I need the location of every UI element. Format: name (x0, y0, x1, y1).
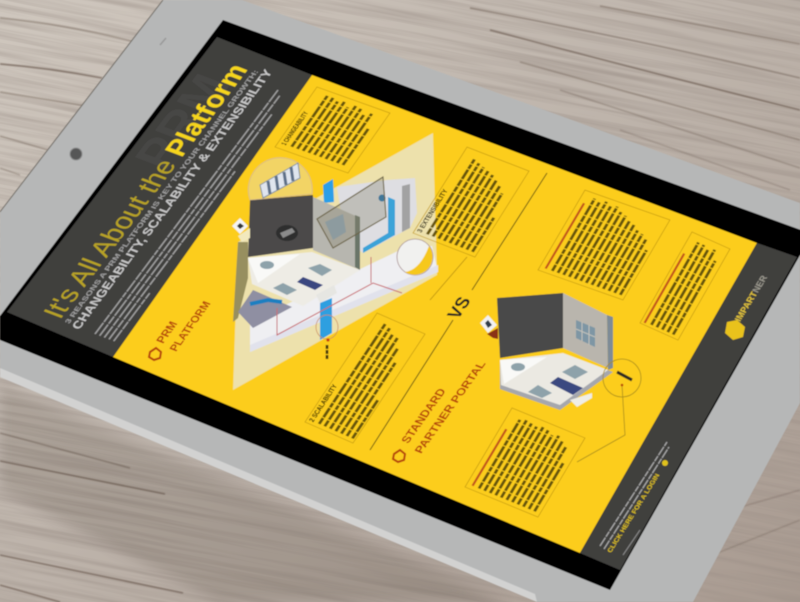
VS label: VS (443, 294, 475, 321)
text panel: standard portal (465, 408, 585, 517)
chimney (487, 328, 498, 339)
brown side wall (233, 242, 248, 322)
magnified window (260, 163, 300, 198)
intro paragraph lines (95, 90, 297, 341)
logo hexagon (725, 320, 745, 340)
wire to callout (577, 385, 625, 462)
tablet edge highlight (0, 0, 163, 212)
facade windows (562, 365, 588, 379)
chimney (232, 218, 248, 234)
text panel: scalability (305, 313, 425, 443)
text panel: changeability (275, 87, 390, 173)
roof emblem (276, 225, 298, 241)
sensor (160, 38, 166, 45)
text panel: PRM comparison upper (538, 190, 670, 300)
facade windows (308, 264, 332, 276)
house foundation (500, 354, 613, 410)
heading: PRM platform (149, 300, 214, 360)
footer small line (623, 530, 640, 555)
text panel: PRM comparison right (640, 232, 730, 340)
heading: standard partner portal (393, 360, 489, 462)
icon: hexagon (149, 348, 161, 360)
facade (500, 353, 608, 405)
white slab (250, 246, 438, 352)
panel heading: 1 CHANGEABILITY (281, 111, 310, 146)
dark roof (248, 195, 313, 257)
open roof plane (317, 177, 386, 248)
callout circle lower (316, 315, 338, 339)
heading: standard partner portal: PARTNER PORTAL (413, 360, 489, 455)
title: It's All About the Platform (37, 60, 254, 322)
gable wall (313, 197, 360, 270)
red heading rule (473, 429, 506, 486)
divider with VS (370, 173, 547, 450)
icon: hexagon (393, 450, 405, 462)
red heading rule (546, 203, 584, 269)
tablet shadow on table (0, 385, 510, 602)
pipe marker (326, 338, 330, 342)
red heading rule (645, 254, 684, 323)
panel heading: 2 SCALABILITY (309, 383, 339, 423)
heading: PRM platform: PRM (155, 320, 181, 345)
callout circle right (397, 239, 433, 275)
blue pipe (320, 298, 332, 340)
header band (7, 37, 312, 357)
heading: PRM platform: PLATFORM (168, 300, 214, 353)
upper room interior (337, 178, 417, 253)
steps (570, 393, 592, 407)
gable wall (563, 293, 608, 368)
footer text lines (600, 442, 669, 549)
lower room floor (238, 290, 292, 328)
red pipes (277, 257, 402, 335)
meter bar (617, 372, 632, 380)
gable window (576, 320, 595, 347)
panel heading: 3 EXTENSIBILITY (417, 188, 450, 234)
heading: standard partner portal: STANDARD (400, 387, 449, 445)
subtitle: 3 REASONS A PRM PLATFORM IS KEY TO YOUR CHANNEL GROWTH: (64, 69, 260, 325)
yellow content panel (113, 75, 757, 553)
facade round window (260, 261, 274, 269)
logo wordmark: IMPARTNER (733, 274, 770, 323)
callout circle (603, 359, 641, 397)
ghost PRM lettering: PRM (123, 67, 242, 176)
text panel: extensibility (413, 147, 529, 257)
magnifier circle (248, 158, 312, 200)
standard portal house (480, 293, 641, 462)
lower blue pipes (250, 300, 282, 304)
camera lens (70, 148, 82, 160)
call to action icon (662, 460, 668, 466)
PRM platform illustration (232, 133, 438, 390)
footer band (580, 243, 797, 570)
blue duct (363, 197, 395, 253)
reasons heading: CHANGEABILITY, SCALABILITY & EXTENSIBILITY (69, 68, 276, 331)
round window (511, 363, 525, 371)
call to action: CLICK HERE FOR A LOGIN (606, 473, 662, 554)
tablet lower bevel (0, 368, 537, 602)
roof window blue panel (323, 179, 334, 203)
translucent cream plane (233, 133, 437, 390)
dark roof (497, 293, 563, 358)
lower facade (248, 252, 360, 306)
